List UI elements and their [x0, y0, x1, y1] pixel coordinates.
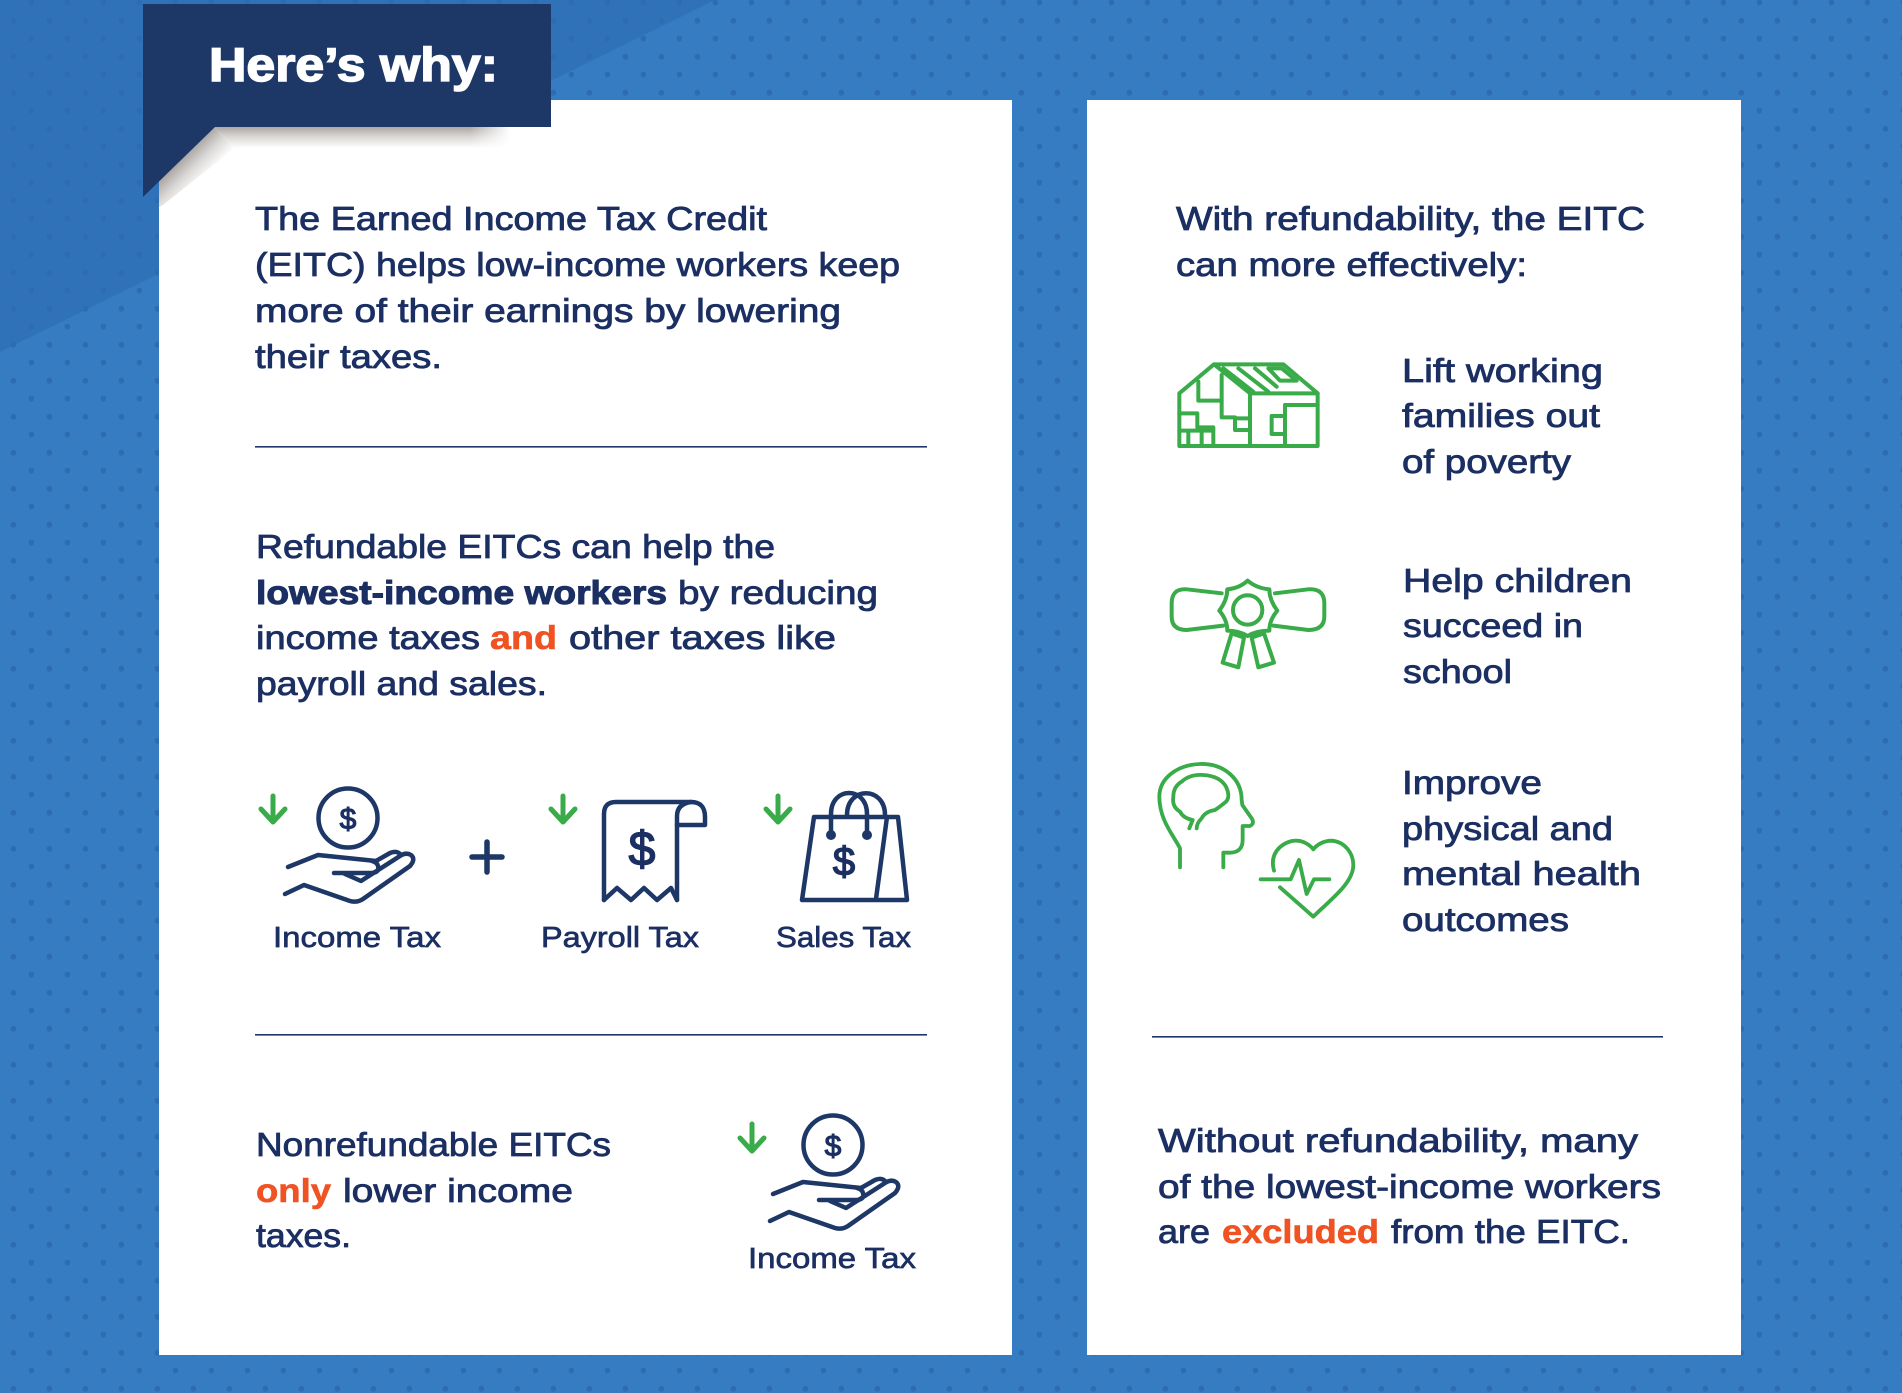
text block: lift working families: Lift working: [1402, 352, 1603, 389]
text block: refundability intro: With refundability, the EITC: [1176, 200, 1645, 237]
text block: improve health: physical and: [1402, 810, 1613, 847]
text block: improve health: [1402, 764, 1641, 938]
label: payroll tax: Payroll Tax: [541, 922, 699, 954]
text block: EITC intro: more of their earnings by lowering: [255, 292, 841, 329]
text block: improve health: outcomes: [1402, 901, 1569, 938]
text block: without refundability: of the lowest-income workers: [1158, 1168, 1661, 1205]
text block: help children: Help children: [1403, 562, 1632, 599]
text block: refundable EITCs: income taxes: [256, 619, 480, 656]
icon: payroll receipt with down arrow: $: [629, 823, 655, 876]
text block: refundable EITCs: [256, 528, 878, 702]
text block: refundable EITCs: lowest-income workers: [256, 574, 667, 611]
text block: EITC intro: [255, 200, 900, 375]
icon: head and heart: [1159, 764, 1353, 917]
text block: improve health: Improve: [1402, 764, 1542, 801]
text block: EITC intro: (EITC) helps low-income workers keep: [255, 246, 900, 283]
text block: help children: school: [1403, 653, 1512, 690]
text block: refundable EITCs: payroll and sales.: [256, 665, 547, 702]
icon: sales bag with down arrow: [766, 793, 907, 900]
text block: refundable EITCs: Refundable EITCs can help the: [256, 528, 775, 565]
text block: refundable EITCs: by reducing: [678, 574, 878, 611]
text block: without refundability: Without refundability, many: [1158, 1122, 1639, 1159]
icon: plus: [472, 842, 502, 872]
banner: Here's why: Here’s why:: [209, 38, 498, 91]
text block: lift working families: families out: [1402, 397, 1600, 434]
text block: help children: succeed in: [1403, 607, 1583, 644]
text block: refundable EITCs: other taxes like: [569, 619, 836, 656]
icon: diploma: [1172, 581, 1324, 667]
text block: nonrefundable EITCs: Nonrefundable EITCs: [256, 1126, 611, 1163]
text block: refundability intro: [1176, 200, 1645, 283]
panel: right card: [1087, 100, 1741, 1355]
text block: refundability intro: can more effectively:: [1176, 246, 1527, 283]
icon: income tax with down arrow: [261, 788, 413, 902]
text block: improve health: mental health: [1402, 855, 1641, 892]
text block: without refundability: from the EITC.: [1391, 1213, 1630, 1250]
text block: nonrefundable EITCs: taxes.: [256, 1217, 351, 1254]
text block: without refundability: [1158, 1122, 1661, 1250]
label: income tax second: Income Tax: [748, 1243, 916, 1275]
label: income tax: Income Tax: [273, 922, 441, 954]
panel: left card: [159, 100, 1012, 1355]
icon: sales bag with down arrow: $: [833, 840, 855, 884]
text block: nonrefundable EITCs: only: [256, 1172, 332, 1209]
icon: income tax with down arrow: $: [340, 803, 357, 836]
text block: EITC intro: The Earned Income Tax Credit: [255, 200, 767, 237]
icon: income tax second with down arrow: $: [825, 1130, 842, 1163]
text block: lift working families: [1402, 352, 1603, 480]
text block: help children: [1403, 562, 1632, 690]
label: sales tax: Sales Tax: [776, 922, 911, 954]
icon: payroll receipt with down arrow: [551, 796, 705, 900]
text block: lift working families: of poverty: [1402, 443, 1572, 480]
text block: EITC intro: their taxes.: [255, 338, 442, 375]
icon: income tax second with down arrow: [740, 1116, 898, 1229]
text block: refundable EITCs: and: [490, 619, 557, 656]
text block: without refundability: excluded: [1222, 1213, 1379, 1250]
banner: Here's why: [143, 4, 551, 197]
text block: without refundability: are: [1158, 1213, 1210, 1250]
text block: nonrefundable EITCs: [256, 1126, 611, 1254]
banner shadow: [159, 127, 510, 207]
icon: house: [1179, 364, 1318, 446]
text block: nonrefundable EITCs: lower income: [343, 1172, 573, 1209]
